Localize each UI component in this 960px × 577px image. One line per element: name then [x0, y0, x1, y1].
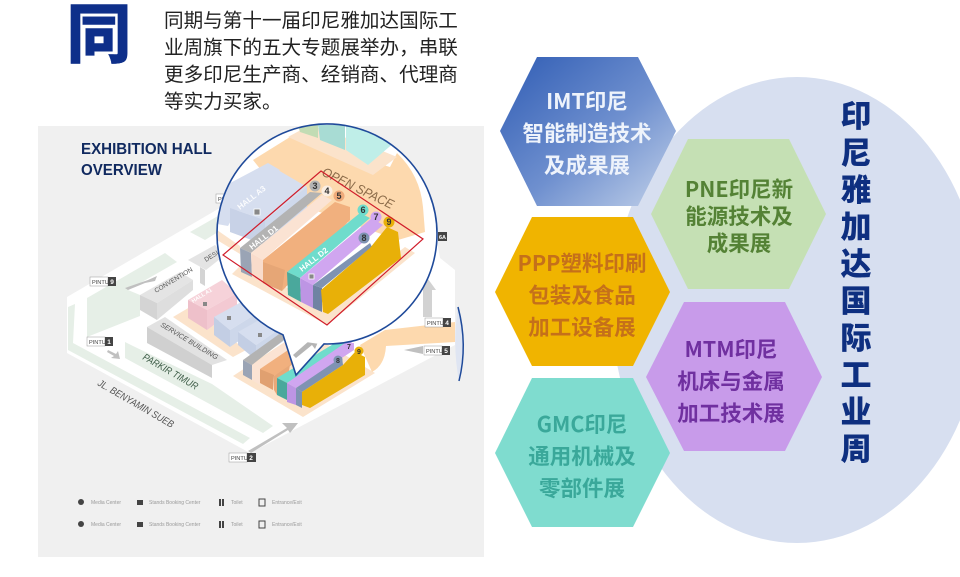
hexagon: IMT: IMT印尼	[546, 85, 628, 116]
hexagon: GMC: 零部件展	[539, 472, 625, 503]
gate labels: PINTU	[426, 349, 443, 355]
open space label: OPEN SPACE	[320, 164, 397, 212]
hexagon: IMT: 智能制造技术	[522, 117, 652, 148]
hall badges: 7	[373, 212, 379, 222]
vertical title: 工	[840, 350, 872, 395]
hexagon: PPP: PPP塑料印刷	[517, 247, 647, 278]
callout outline	[217, 124, 437, 375]
building: hall A1: HALL A1	[191, 287, 213, 305]
vertical title: 雅	[840, 165, 872, 210]
legend: Entrance/Exit	[272, 500, 302, 506]
intro text block: 等实力买家。	[164, 85, 282, 114]
hexagon: GMC: GMC印尼	[537, 408, 627, 439]
hexagon: GMC	[495, 378, 670, 527]
hexagon: MTM	[646, 302, 822, 451]
hall orange	[263, 202, 350, 291]
callout: magnified halls	[217, 124, 437, 375]
hall labels: HALL D1	[248, 223, 280, 252]
hexagon: PNE	[651, 139, 826, 289]
map heading: EXHIBITION HALL	[81, 141, 212, 158]
intro text block: 更多印尼生产商、经销商、代理商	[164, 58, 458, 87]
hall badges: 5	[336, 191, 342, 201]
hexagon: PNE: PNE印尼新	[685, 173, 793, 204]
gate labels: 2	[249, 455, 253, 462]
small halls D in map: 8	[336, 358, 340, 365]
hall D1 grey	[240, 192, 322, 277]
hall badges	[310, 180, 394, 244]
hexagon: IMT: 及成果展	[544, 149, 630, 180]
gate labels: PINTU	[89, 340, 106, 346]
hall slate	[313, 243, 372, 312]
hall light peach	[251, 195, 332, 283]
road labels: PARKIR TIMUR	[140, 352, 200, 393]
hexagon: PNE: 成果展	[707, 227, 771, 258]
gate labels: PINTU	[231, 456, 248, 462]
legend: Toilet	[231, 522, 243, 528]
hexagon: PPP	[495, 217, 670, 366]
hall labels	[236, 184, 330, 274]
hall badges: 4	[324, 186, 330, 196]
gate labels: 9	[110, 279, 114, 286]
hall badges: 3	[312, 181, 318, 191]
legend: Media Center	[91, 522, 121, 528]
vertical title: 业	[840, 387, 872, 432]
vertical title: 际	[840, 313, 872, 358]
panel: exhibition hall map	[38, 124, 484, 557]
legend: Stands Booking Center	[149, 500, 201, 506]
gate labels	[87, 194, 451, 462]
legend: Toilet	[231, 500, 243, 506]
hexagon: MTM: 机床与金属	[677, 365, 785, 396]
hexagon: PNE: 能源技术及	[685, 200, 793, 231]
hall yellow	[321, 227, 401, 314]
gate labels: 5	[444, 348, 448, 355]
hall badges: 9	[386, 217, 392, 227]
hall badges: 6	[360, 205, 366, 215]
small halls D in map: 9	[357, 349, 361, 356]
arrows	[107, 276, 436, 453]
buildings: halls A2 and A3	[214, 300, 285, 360]
gate labels: 4	[445, 320, 449, 327]
gate labels: PI	[218, 197, 224, 203]
legend	[78, 499, 302, 528]
building: hall A1	[188, 280, 237, 330]
vertical title: 周	[840, 424, 872, 469]
map heading: OVERVIEW	[81, 162, 162, 179]
building: design pick	[188, 245, 225, 286]
road labels: JL. BENYAMIN SUEB	[95, 378, 176, 431]
vertical title: 达	[840, 239, 872, 284]
hall labels: HALL D2	[298, 245, 330, 274]
hexagon: PPP: 加工设备展	[528, 311, 636, 342]
building: convention: CONVENTION	[153, 266, 194, 295]
building: service building: SERVICE BUILDING	[159, 322, 219, 362]
legend: Stands Booking Center	[149, 522, 201, 528]
vertical title: 国	[840, 276, 872, 321]
red outline	[223, 171, 423, 325]
intro text block: 同期与第十一届印尼雅加达国际工	[164, 4, 458, 33]
hexagon: MTM: MTM印尼	[684, 333, 778, 364]
vertical title	[840, 91, 872, 469]
hexagon: MTM: 加工技术展	[677, 397, 785, 428]
hexagon: PPP: 包装及食品	[528, 279, 636, 310]
hall labels: HALL A3	[236, 184, 268, 212]
vertical title: 加	[840, 202, 872, 247]
hall badges: 8	[361, 233, 367, 243]
vertical title: 尼	[840, 128, 872, 173]
vertical title: 印	[840, 91, 872, 136]
gate labels: PINTU	[427, 321, 444, 327]
big ellipse background	[612, 77, 960, 543]
gate labels: 1	[107, 339, 111, 346]
gate labels: PINTU	[92, 280, 109, 286]
hall purple	[300, 218, 383, 308]
road labels	[95, 352, 200, 431]
hexagon: GMC: 通用机械及	[528, 440, 636, 471]
legend: Media Center	[91, 500, 121, 506]
right arc fragment	[455, 307, 463, 381]
legend: Entrance/Exit	[272, 522, 302, 528]
map heading	[81, 141, 212, 179]
building: service building	[147, 317, 227, 378]
intro text block: 业周旗下的五大专题展举办，串联	[164, 31, 458, 60]
gate labels: 6A	[439, 235, 446, 241]
hexagon: IMT	[500, 57, 676, 206]
small halls D in map: 7	[347, 344, 351, 351]
hall teal	[287, 213, 370, 302]
building: design pick: DESI	[203, 250, 220, 264]
building: convention	[140, 266, 194, 320]
intro text block	[164, 4, 458, 114]
small halls D in map	[243, 325, 365, 408]
